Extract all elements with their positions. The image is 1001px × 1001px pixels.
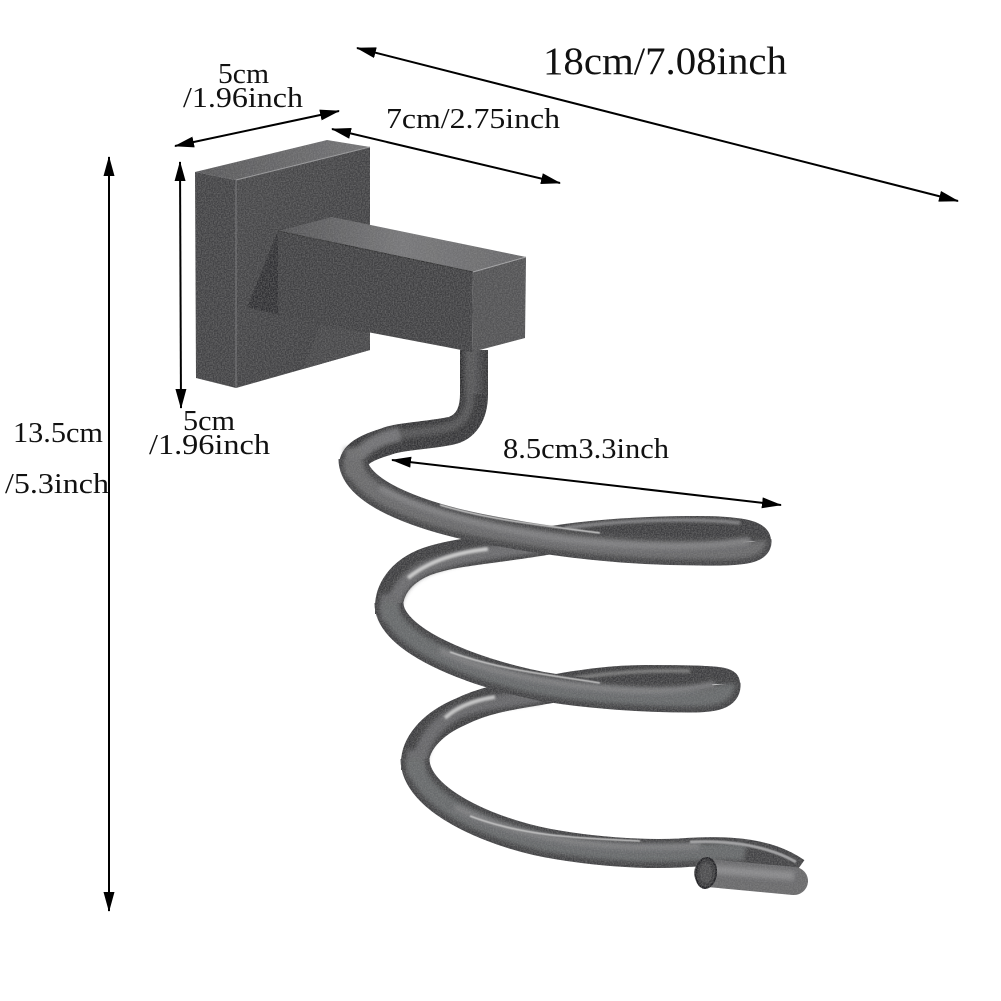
upper coil (352, 350, 757, 551)
label: coil diameter: 8.5cm3.3inch (503, 433, 670, 465)
label: overall height: /5.3inch (5, 468, 110, 500)
label: overall height: 13.5cm (13, 417, 103, 449)
label: plate height: /1.96inch (149, 429, 271, 461)
label: overall depth: 18cm/7.08inch (543, 40, 787, 83)
label: overall height (5, 417, 110, 500)
label: plate height (149, 405, 271, 461)
arrow: plate height 5cm (180, 162, 181, 408)
arrow: plate width 5cm (175, 111, 339, 146)
middle coil (389, 520, 757, 698)
label: plate width (183, 58, 304, 114)
arrow: overall height 13.5cm (108, 157, 110, 911)
label: plate width: 5cm (218, 58, 269, 90)
spiral coil (352, 350, 796, 889)
arrow: coil diameter 8.5cm (392, 460, 781, 505)
wall plate (195, 140, 370, 388)
support arm (278, 217, 526, 352)
hook end tube (694, 857, 794, 889)
label: plate width: /1.96inch (183, 82, 304, 114)
arrow: arm length 7cm (332, 129, 560, 183)
lower coil and hook (415, 671, 796, 889)
label: arm length: 7cm/2.75inch (386, 103, 561, 135)
label: plate height: 5cm (183, 405, 235, 437)
product: hair dryer holder (195, 140, 796, 889)
arrow: overall depth 18cm (357, 48, 958, 201)
